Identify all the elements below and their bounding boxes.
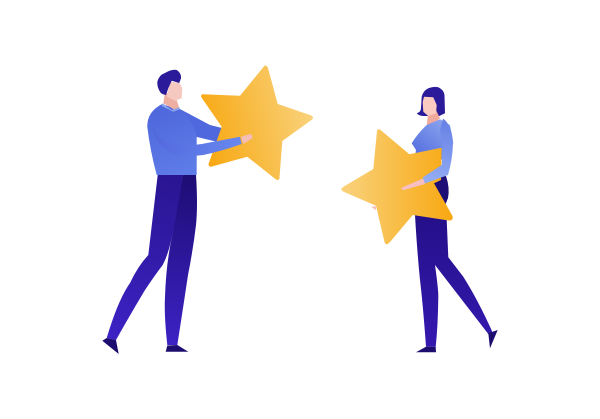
woman: hips [430, 176, 449, 208]
woman: neck [427, 110, 440, 125]
woman figure [371, 87, 498, 352]
man: rear leg [165, 175, 197, 345]
man figure [102, 70, 222, 354]
man: hair [157, 70, 181, 95]
woman: right shoe [488, 330, 498, 348]
star: held by man [201, 66, 313, 180]
woman: hand behind star [371, 206, 376, 210]
star: held by woman [341, 129, 453, 244]
man: torso [147, 104, 197, 175]
man: front leg [107, 175, 183, 340]
man: neck [163, 92, 179, 110]
man: right shoe [166, 345, 188, 352]
man: front arm and hand over star [153, 123, 252, 157]
man: back arm [178, 108, 222, 142]
man: face [167, 82, 182, 101]
woman: torso [412, 119, 453, 160]
woman: left shoe [416, 347, 436, 352]
woman: forearm and hand [402, 178, 425, 190]
woman: legs [415, 215, 492, 347]
woman: face [423, 97, 437, 116]
man: hand [241, 134, 252, 144]
man: sleeve [153, 123, 242, 157]
woman: hair [417, 87, 445, 116]
man: left shoe [102, 338, 119, 354]
woman: arm over star [402, 118, 453, 190]
man: collar [162, 103, 180, 112]
woman: sleeve [423, 118, 453, 184]
